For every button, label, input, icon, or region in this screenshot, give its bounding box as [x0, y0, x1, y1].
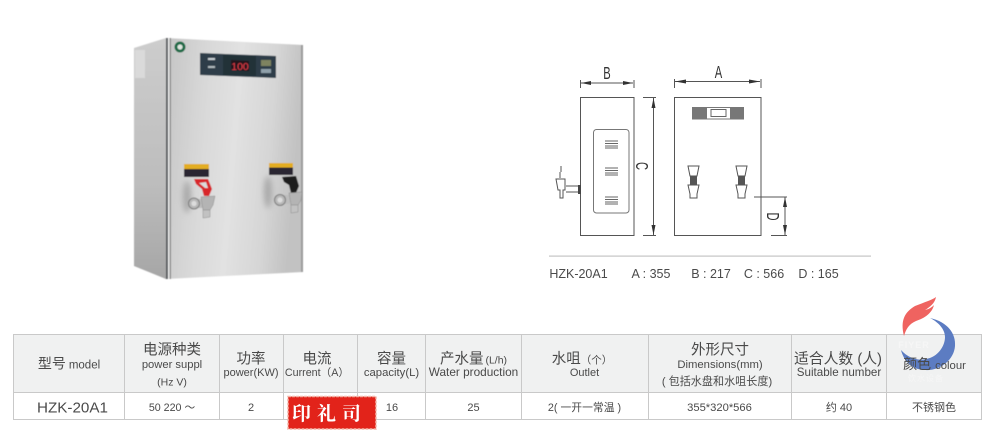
- dimension A: A: [715, 62, 722, 83]
- data row: 不锈钢色: [912, 400, 956, 414]
- header: water production: 产水量(L/h): [440, 350, 507, 368]
- header: water production: [429, 350, 518, 379]
- data row: [37, 400, 956, 416]
- product photo: stainless water boiler: [134, 38, 303, 279]
- header: outlet: [552, 350, 612, 379]
- side view: [556, 98, 634, 236]
- header: colour: 颜色 colour: [903, 356, 966, 372]
- header: suitable number: 适合人数 (人): [794, 350, 882, 368]
- dimension D: D: [762, 212, 783, 221]
- dimension values: D : 165: [798, 267, 839, 281]
- dimension B: B: [603, 63, 611, 84]
- header: power: 功率: [236, 350, 266, 368]
- table grid: [14, 334, 982, 420]
- watermark logo: flame and crescent: [898, 297, 955, 383]
- header: current: 电流: [302, 350, 332, 368]
- dimension A: [674, 62, 761, 88]
- header: water production: Water production: [429, 365, 518, 379]
- header: dimensions: [662, 342, 772, 388]
- dimension values: A : 355: [632, 267, 671, 281]
- header: power: [223, 350, 279, 379]
- header: dimensions: Dimensions(mm): [677, 359, 763, 371]
- header: current: [285, 350, 349, 379]
- front view: [674, 98, 761, 236]
- header: power supply: power suppl: [142, 359, 202, 371]
- data row: 约 40: [826, 401, 852, 414]
- header: suitable number: [794, 350, 882, 379]
- data row: 16: [386, 402, 398, 414]
- header: capacity: 容量: [377, 350, 406, 368]
- header: current: Current（A）: [285, 366, 349, 379]
- dimension C: C: [631, 162, 652, 170]
- dimension C: [631, 98, 656, 236]
- control panel display: [200, 53, 276, 78]
- data row: HZK-20A1: [37, 400, 108, 416]
- header: outlet: Outlet: [570, 367, 599, 379]
- dimension values: B : 217: [691, 267, 731, 281]
- dimension D: [754, 197, 787, 236]
- header: power supply: 电源种类: [143, 342, 201, 358]
- data row: 25: [467, 402, 480, 414]
- header: outlet: 水咀（个）: [552, 350, 612, 368]
- right warning label: [269, 163, 293, 175]
- header: capacity: capacity(L): [364, 367, 419, 379]
- header: capacity: [364, 350, 419, 379]
- watermark stamp: 印礼司: [292, 399, 367, 426]
- logo badge: [174, 42, 186, 52]
- watermark logo: flame and crescent: FIYER: [898, 340, 930, 350]
- left warning label: [184, 164, 209, 177]
- control panel display: 100: [231, 61, 249, 73]
- header: power supply: (Hz V): [157, 376, 187, 388]
- dimension values: [549, 267, 839, 281]
- header: suitable number: Suitable number: [797, 366, 881, 379]
- header: dimensions: ( 包括水盘和水咀长度): [662, 374, 772, 388]
- data row: 50 220 ～: [149, 402, 195, 414]
- header: power supply: [142, 342, 202, 388]
- left tap with red handle: [188, 179, 215, 218]
- header: power: power(KW): [223, 367, 279, 379]
- spec table: [13, 334, 982, 420]
- header: dimensions: 外形尺寸: [691, 342, 749, 358]
- data row: 355*320*566: [687, 402, 752, 414]
- dimension values: HZK-20A1: [549, 267, 608, 281]
- right tap with black handle: [274, 176, 302, 213]
- header: model: 型号 model: [38, 356, 100, 372]
- watermark logo: flame and crescent: 饮水设备: [908, 373, 944, 383]
- dimension B: [580, 63, 634, 88]
- data row: 2( 一开一常温 ): [548, 401, 621, 414]
- divider under drawing: [549, 256, 871, 257]
- dimension drawing: [556, 62, 787, 236]
- dimension values: C : 566: [744, 267, 784, 281]
- data row: 2: [248, 402, 254, 414]
- table header background: [13, 334, 981, 392]
